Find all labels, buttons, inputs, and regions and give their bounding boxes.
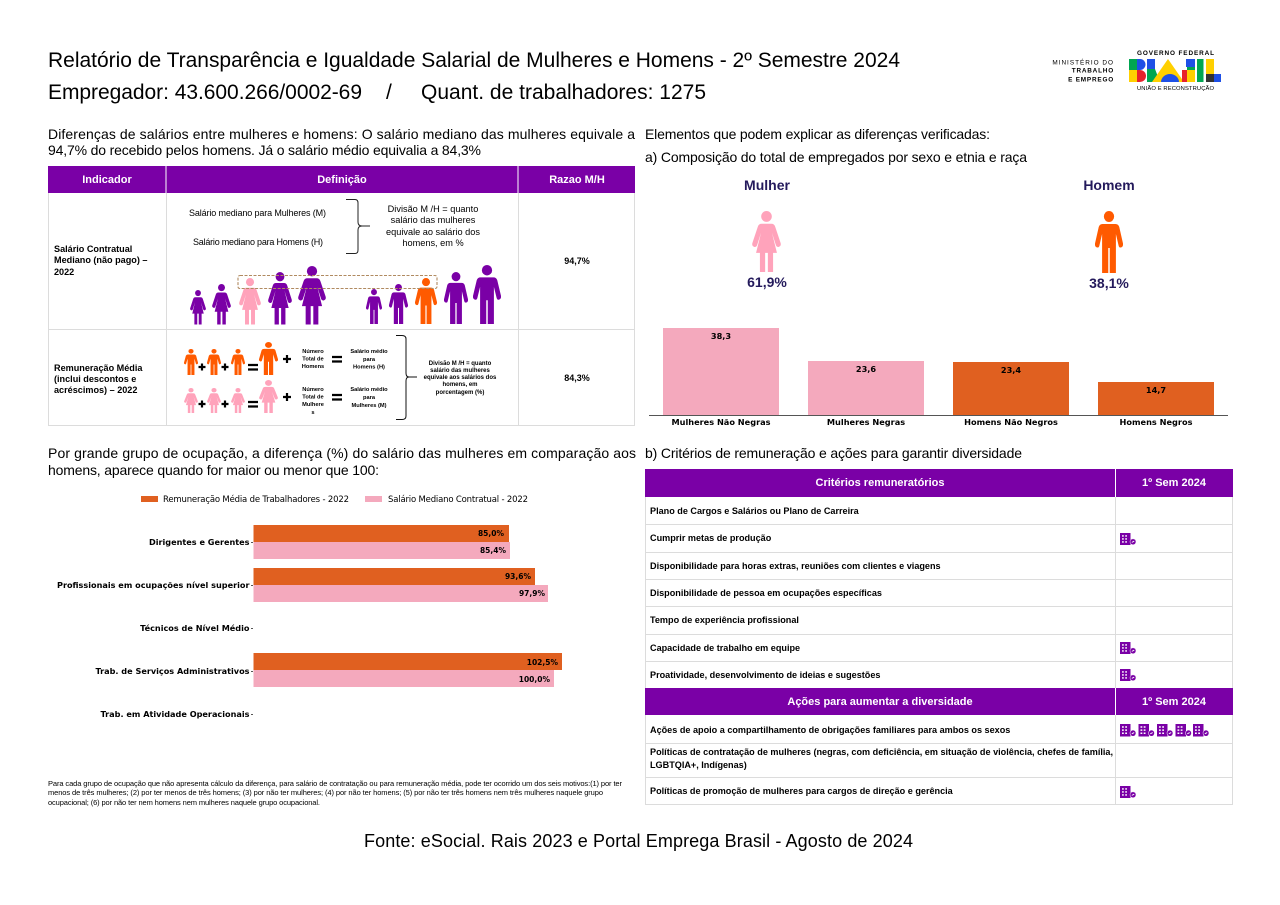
title: /: [386, 81, 392, 104]
criteria rows: Plano de Cargos e Salários ou Plano de Carreira: [650, 506, 860, 516]
logo: governo federal: UNIÃO E RECONSTRUÇÃO: [1137, 85, 1214, 92]
table header: Indicador: [82, 174, 132, 186]
header: critérios remuneratórios: [645, 469, 1233, 497]
header: ações: [645, 688, 1233, 715]
legend: Remuneração Média de Trabalhadores - 2022: [163, 494, 349, 505]
title: Empregador: 43.600.266/0002-69: [48, 81, 362, 104]
bar chart: grupos de ocupação: 97,9%: [519, 589, 545, 598]
value: 94,7%: 94,7%: [564, 256, 590, 266]
text: número total de mulheres: [302, 387, 324, 416]
icon: brace mediano: [346, 200, 370, 254]
row label: salário contratual: Mediano (não pago) –: [54, 255, 147, 265]
row label: remuneração média: (inclui descontos e: [54, 374, 136, 384]
icons: women average equation: [184, 380, 342, 413]
footnote: menos de três mulheres; (2) por ter menos de três homens; (3) por não ter mulheres; (4) por não ter homens; (5) por não ter três homens nem três mulheres naquele grupo: [48, 788, 603, 797]
bar chart: composição: 23,4: [1001, 365, 1021, 375]
text: salário médio homens: Salário médio: [350, 349, 388, 355]
footnote: ocupacional; (6) por não ter nem homens nem mulheres naquele grupo ocupacional.: [48, 798, 320, 807]
icons: women group: [190, 266, 326, 324]
panel: homem: 38,1%: [1089, 275, 1129, 291]
text: salário médio mulheres: [350, 387, 388, 409]
bar chart: grupos de ocupação: 102,5%: [527, 658, 558, 667]
panel: homem: [1083, 177, 1135, 291]
icon: brace média: [396, 336, 417, 420]
text block: elementos: [645, 126, 1027, 165]
criteria rows: Tempo de experiência profissional: [650, 615, 799, 625]
header: critérios remuneratórios: 1º Sem 2024: [1142, 477, 1207, 489]
header: ações: Ações para aumentar a diversidade: [787, 696, 973, 708]
table header: [48, 166, 635, 193]
bar chart: grupos de ocupação: Profissionais em ocupações nível superior: [57, 580, 250, 590]
logo: governo federal: GOVERNO FEDERAL: [1137, 50, 1214, 57]
text: número total de mulheres: Número: [302, 387, 324, 393]
definition text: salário mediano: Salário mediano para Homens (H): [193, 237, 323, 247]
action rows: Políticas de promoção de mulheres para cargos de direção e gerência: [650, 786, 954, 796]
definition text: divisão M/H: homens, em %: [402, 238, 464, 248]
text: salário médio mulheres: para: [363, 395, 376, 401]
logo: governo federal: [1129, 50, 1221, 92]
bar chart: grupos de ocupação: Técnicos de Nível Médio: [140, 623, 250, 633]
criteria rows: Cumprir metas de produção: [650, 533, 772, 543]
header: ações: 1º Sem 2024: [1142, 696, 1207, 708]
bar chart: composição: [649, 328, 1228, 427]
action rows: [650, 725, 1113, 796]
bar chart: grupos de ocupação: 85,4%: [480, 546, 506, 555]
text block: grande grupo de ocupação: [48, 445, 636, 478]
text block: elementos: a) Composição do total de empregados por sexo e etnia e raça: [645, 149, 1027, 165]
table header: Razao M/H: [549, 174, 605, 186]
text block: critérios heading: b) Critérios de remuneração e ações para garantir diversidade: [645, 445, 1022, 461]
criteria rows: Proatividade, desenvolvimento de ideias e sugestões: [650, 670, 880, 680]
text block: diferenças de salários: 94,7% do recebido pelos homens. Já o salário médio equivalia a 84,3%: [48, 142, 481, 158]
bar chart: composição: 14,7: [1146, 385, 1166, 395]
icon: man: [1095, 211, 1123, 273]
criteria rows: [650, 506, 941, 680]
legend: [141, 494, 528, 505]
text: número total de homens: Total de: [302, 356, 324, 362]
definition text: salário mediano: Salário mediano para Mulheres (M): [189, 208, 326, 218]
bar chart: grupos de ocupação: 85,0%: [478, 529, 504, 538]
icons: criteria: [1120, 533, 1136, 681]
criteria rows: Disponibilidade para horas extras, reuniões com clientes e viagens: [650, 561, 941, 571]
source: Fonte: eSocial. Rais 2023 e Portal Emprega Brasil - Agosto de 2024: [364, 831, 913, 851]
logo: ministério: [1052, 58, 1114, 84]
text: número total de mulheres: Total de: [302, 394, 324, 400]
logo: ministério: E EMPREGO: [1068, 76, 1114, 84]
text: número total de mulheres: Mulhere: [302, 402, 324, 408]
text: salário médio mulheres: Mulheres (M): [351, 403, 387, 409]
text: salário médio homens: [350, 349, 388, 370]
panel: mulher: [744, 177, 790, 290]
text block: diferenças de salários: [48, 126, 635, 158]
text: divisão M/H porcentagem: [424, 361, 497, 396]
panel: mulher: Mulher: [744, 177, 790, 193]
bar chart: grupos de ocupação: 100,0%: [519, 675, 550, 684]
action rows: Políticas de contratação de mulheres (negras, com deficiência, em situação de violência, chefes de família,: [650, 747, 1113, 757]
row label: salário contratual: [54, 244, 147, 277]
text: salário médio homens: para: [363, 357, 376, 363]
footnote: Para cada grupo de ocupação que não apresenta cálculo da diferença, para salário de contratação ou para remuneração média, pode ter ocorrido um dos seis motivos:(1) por ter: [48, 779, 622, 788]
bar chart: composição: Homens Não Negros: [964, 417, 1058, 427]
bar chart: grupos de ocupação: 93,6%: [505, 572, 531, 581]
bar chart: composição: Homens Negros: [1120, 417, 1193, 427]
text: divisão M/H porcentagem: porcentagem (%): [436, 390, 484, 396]
logo: ministério: TRABALHO: [1072, 68, 1114, 74]
value: 84,3%: 84,3%: [564, 373, 590, 383]
criteria rows: Disponibilidade de pessoa em ocupações específicas: [650, 588, 882, 598]
action rows: LGBTQIA+, Indígenas): [650, 760, 747, 770]
bar chart: composição: Mulheres Não Negras: [671, 417, 771, 427]
row label: remuneração média: [54, 363, 143, 395]
panel: homem: Homem: [1083, 177, 1135, 193]
panel: mulher: 61,9%: [747, 274, 787, 290]
title: Quant. de trabalhadores: 1275: [421, 81, 706, 104]
definition text: divisão M/H: equivale ao salário dos: [386, 227, 480, 237]
legend: Salário Mediano Contratual - 2022: [388, 495, 528, 505]
bar chart: grupos de ocupação: Trab. de Serviços Administrativos: [95, 666, 250, 676]
definition text: salário mediano: [189, 208, 326, 247]
definition text: divisão M/H: salário das mulheres: [391, 215, 476, 225]
bar chart: grupos de ocupação: [57, 525, 562, 719]
bar chart: composição: 23,6: [856, 364, 876, 374]
title: Relatório de Transparência e Igualdade Salarial de Mulheres e Homens - 2º Semestre 2024: [48, 49, 900, 72]
text block: elementos: Elementos que podem explicar as diferenças verificadas:: [645, 126, 990, 142]
text: número total de mulheres: s: [311, 410, 315, 416]
text: salário médio homens: Homens (H): [353, 364, 385, 370]
logo: ministério: MINISTÉRIO DO: [1052, 58, 1114, 66]
panel: tabela indicador: [48, 166, 635, 426]
footnote: [48, 779, 622, 807]
text block: grande grupo de ocupação: Por grande grupo de ocupação, a diferença (%) do salário das mulheres em comparação aos: [48, 445, 636, 461]
row label: remuneração média: acréscimos) – 2022: [54, 385, 137, 395]
row label: remuneração média: Remuneração Média: [54, 363, 143, 373]
icons: men group: [366, 265, 501, 324]
text block: grande grupo de ocupação: homens, aparece quando for maior ou menor que 100:: [48, 462, 379, 478]
text: divisão M/H porcentagem: salário das mulheres: [430, 368, 491, 374]
text: número total de homens: Número: [302, 349, 324, 355]
icon: woman: [752, 211, 781, 272]
text: número total de homens: [302, 349, 324, 370]
definition text: divisão M/H: Divisão M /H = quanto: [388, 204, 478, 214]
bar chart: composição: Mulheres Negras: [827, 417, 905, 427]
icons: men average equation: [184, 342, 342, 375]
text block: diferenças de salários: Diferenças de salários entre mulheres e homens: O salário mediano das mulheres equivale a: [48, 126, 635, 142]
text: número total de homens: Homens: [302, 364, 324, 370]
text: divisão M/H porcentagem: Divisão M /H = quanto: [429, 361, 492, 367]
panel: tabela critérios: [645, 469, 1233, 805]
text: salário médio mulheres: Salário médio: [350, 387, 388, 393]
title: [48, 49, 900, 104]
median highlight box: [238, 276, 437, 288]
icons: actions: [1120, 724, 1209, 798]
text: divisão M/H porcentagem: homens, em: [442, 382, 478, 388]
bar chart: grupos de ocupação: Trab. em Atividade Operacionais: [101, 709, 250, 719]
table header: Definição: [317, 174, 367, 186]
row label: salário contratual: 2022: [54, 267, 74, 277]
text: divisão M/H porcentagem: equivale aos salários dos: [424, 375, 497, 381]
bar chart: grupos de ocupação: Dirigentes e Gerentes: [149, 537, 250, 547]
row label: salário contratual: Salário Contratual: [54, 244, 132, 254]
definition text: divisão M/H: [386, 204, 480, 248]
bar chart: composição: 38,3: [711, 331, 731, 341]
action rows: Ações de apoio a compartilhamento de obrigações familiares para ambos os sexos: [650, 725, 1010, 735]
header: critérios remuneratórios: Critérios remuneratórios: [816, 477, 944, 489]
criteria rows: Capacidade de trabalho em equipe: [650, 643, 800, 653]
